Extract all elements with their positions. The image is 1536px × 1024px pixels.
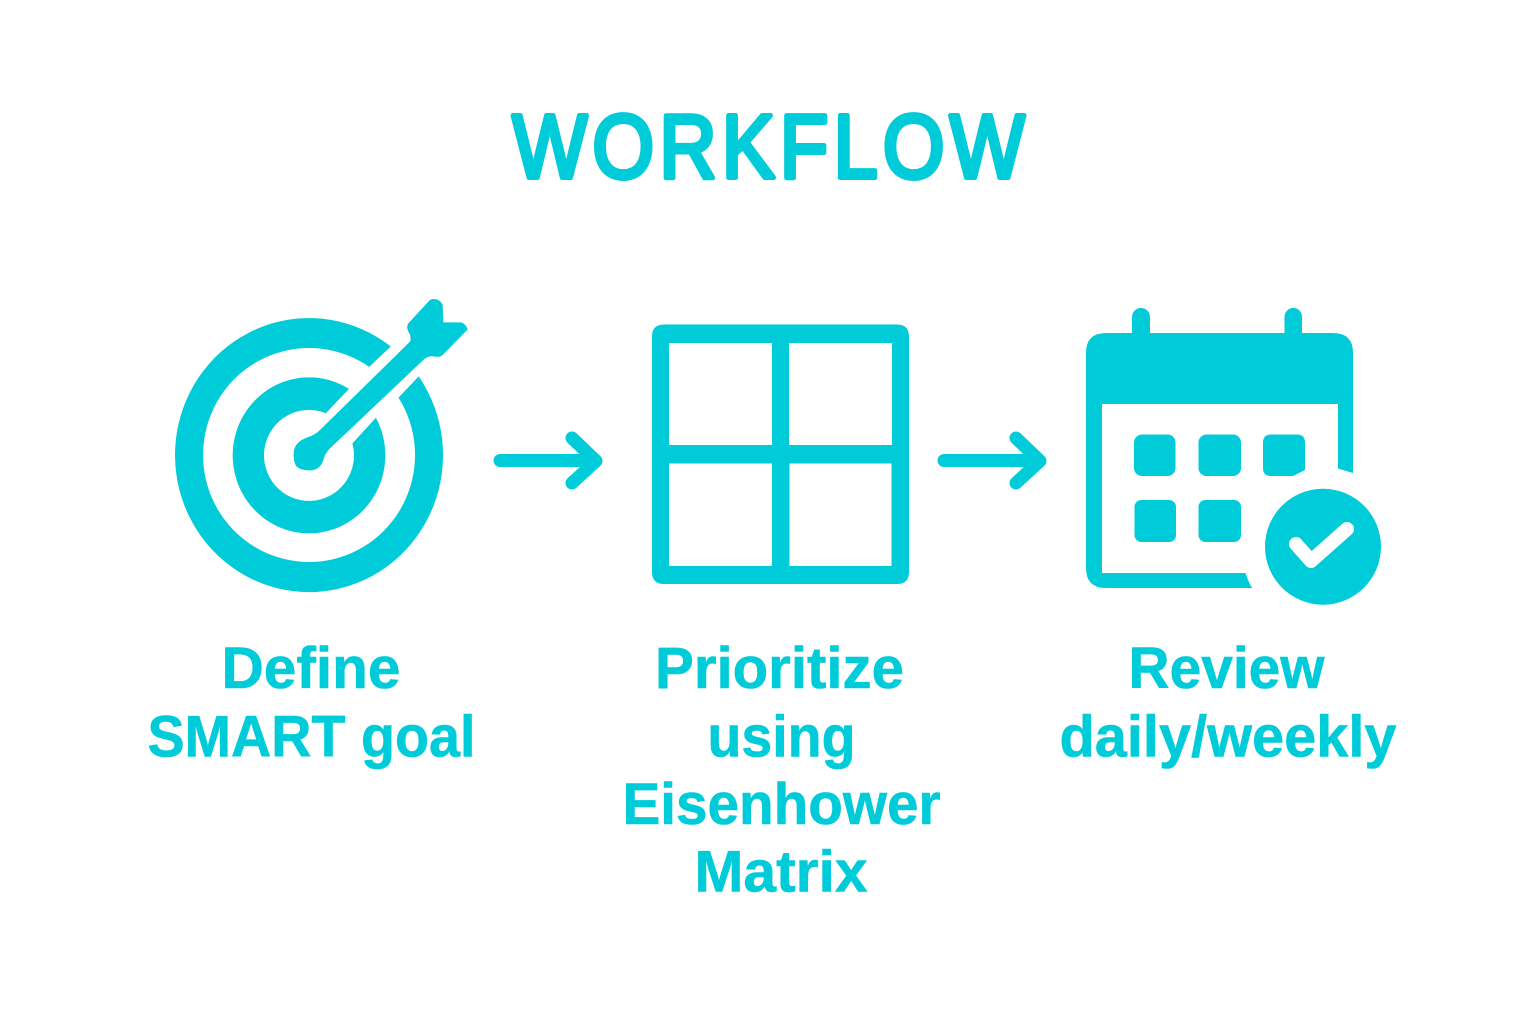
label: review daily/weekly: Review xyxy=(1128,636,1325,701)
label: prioritize using Eisenhower Matrix: Matrix xyxy=(694,840,868,904)
arrow: step one to step two xyxy=(500,438,596,483)
label: review daily/weekly xyxy=(1060,636,1396,770)
label: review daily/weekly: daily/weekly xyxy=(1060,704,1396,770)
label: prioritize using Eisenhower Matrix: Eisenhower xyxy=(622,772,940,837)
label: prioritize using Eisenhower Matrix: Prioritize xyxy=(655,636,904,701)
label: define SMART goal xyxy=(148,636,476,770)
arrow: step two to step three xyxy=(944,438,1040,483)
icon: Eisenhower matrix grid xyxy=(652,324,909,584)
icon: calendar with check badge xyxy=(1086,308,1381,605)
title: WORKFLOW xyxy=(512,96,1025,197)
label: prioritize using Eisenhower Matrix xyxy=(622,636,940,904)
label: prioritize using Eisenhower Matrix: using xyxy=(708,704,856,770)
label: define SMART goal: Define xyxy=(222,636,400,701)
icon: target with arrow xyxy=(175,299,468,592)
label: define SMART goal: SMART goal xyxy=(148,704,476,770)
